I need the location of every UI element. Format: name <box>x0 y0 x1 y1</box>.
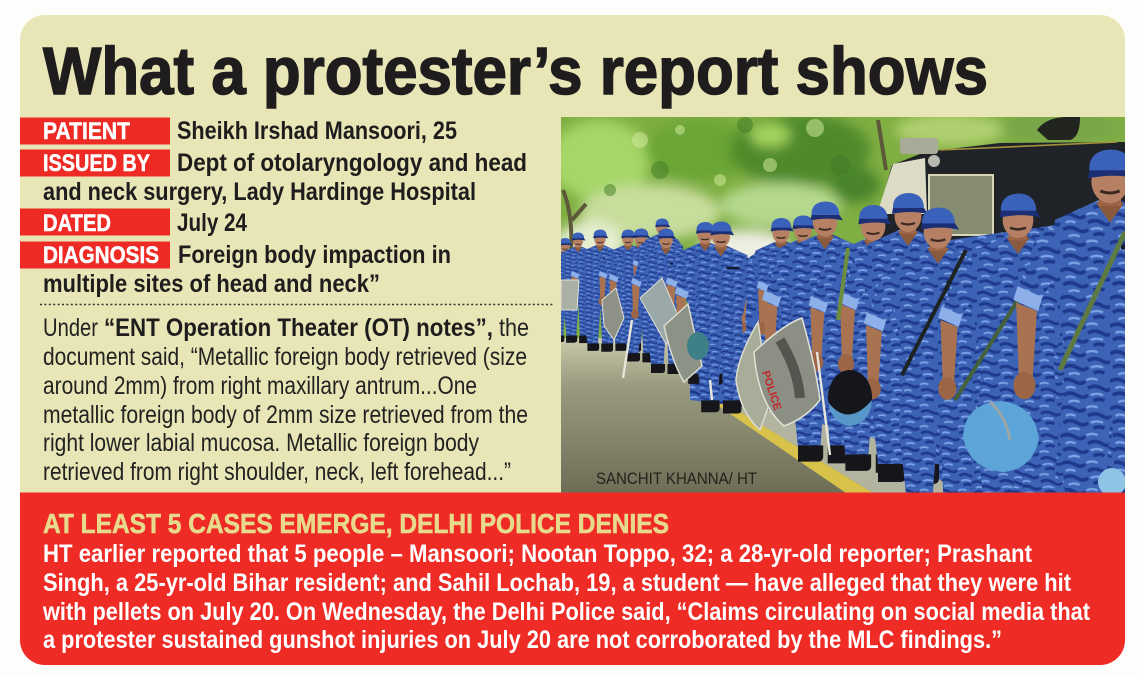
red panel body text <box>42 540 1091 654</box>
red panel body text: a protester sustained gunshot injuries on July 20 are not corroborated by the MLC findings.” <box>43 626 1002 654</box>
red panel heading: AT LEAST 5 CASES EMERGE, DELHI POLICE DENIES <box>43 508 669 539</box>
trees <box>561 117 1102 258</box>
value: patient name: Sheikh Irshad Mansoori, 25 <box>177 117 457 145</box>
road marking <box>720 404 872 492</box>
riot shields <box>664 304 770 430</box>
label: issued by: ISSUED BY <box>43 150 150 177</box>
text block: ENT operation theater notes: Under <box>43 314 98 342</box>
value: diagnosis: Foreign body impaction in <box>178 241 451 269</box>
value: issuing department: and neck surgery, Lady Hardinge Hospital <box>43 178 476 206</box>
label: dated: DATED <box>43 210 111 237</box>
title: What a protester’s report shows <box>43 34 988 109</box>
label: patient <box>20 118 170 145</box>
police riot shield: POLICE <box>759 369 783 412</box>
label: diagnosis: DIAGNOSIS <box>43 242 159 269</box>
shoulder straps <box>838 248 1040 400</box>
far group of personnel <box>561 218 723 385</box>
text block: ENT operation theater notes: right lower labial mucosa. Metallic foreign body <box>43 429 479 457</box>
label: dated <box>20 208 170 237</box>
value: date: July 24 <box>177 209 247 237</box>
mid group of personnel <box>674 216 814 414</box>
text block: ENT operation theater notes: metallic foreign body of 2mm size retrieved from the <box>43 401 528 429</box>
text block: ENT operation theater notes: the <box>499 314 529 342</box>
text block: ENT operation theater notes: around 2mm) from right maxillary antrum...One <box>43 372 477 400</box>
text block: ENT operation theater notes: “ENT Operation Theater (OT) notes”, <box>104 314 493 342</box>
text block: ENT operation theater notes: document said, “Metallic foreign body retrieved (size <box>43 343 527 371</box>
value: issuing department <box>43 149 527 206</box>
lathi canes <box>622 320 832 456</box>
value: issuing department: Dept of otolaryngology and head <box>177 149 527 177</box>
close personnel <box>838 193 1062 492</box>
far shields <box>561 278 680 344</box>
red panel body text: HT earlier reported that 5 people – Mansoori; Nootan Toppo, 32; a 28-yr-old reporter; Prashant <box>43 540 1033 568</box>
panel: cases and police denial <box>20 492 1125 665</box>
text block: ENT operation theater notes <box>43 314 529 486</box>
helmets <box>828 370 1126 496</box>
soldier mass <box>690 215 1125 493</box>
value: diagnosis <box>43 241 451 298</box>
front group of personnel <box>762 202 892 473</box>
photo: police personnel marching <box>561 117 1125 492</box>
photo credit: SANCHIT KHANNA/ HT <box>596 469 757 488</box>
text block: ENT operation theater notes: retrieved from right shoulder, neck, left forehead...” <box>43 458 511 486</box>
label: patient: PATIENT <box>43 118 130 145</box>
panel: patient details <box>20 117 527 298</box>
road <box>561 338 872 492</box>
police riot shield <box>754 318 820 426</box>
armoured vehicle <box>880 117 1125 240</box>
value: diagnosis: multiple sites of head and neck” <box>43 270 380 298</box>
